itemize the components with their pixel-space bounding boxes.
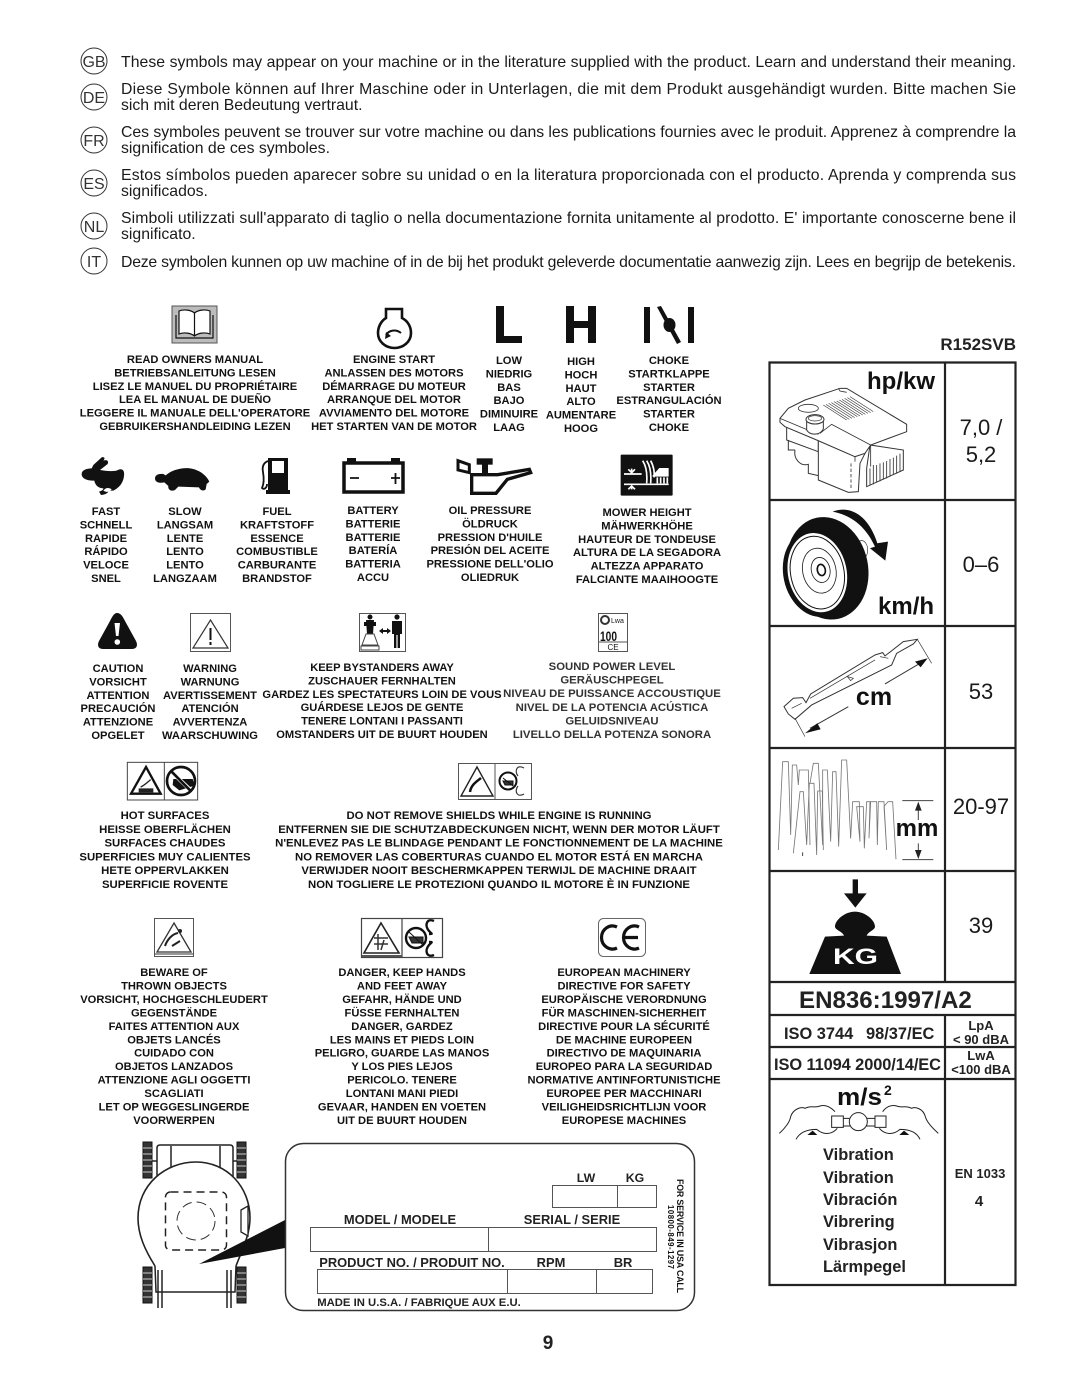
row: vibration: Lärmpegel: [823, 1258, 906, 1276]
label: high: ALTO: [566, 396, 596, 408]
label: mower height: HAUTEUR DE TONDEUSE: [578, 534, 716, 546]
label: slow: LANGSAM: [157, 519, 213, 531]
label: danger keep hands: LES MAINS ET PIEDS LOIN: [330, 1034, 474, 1046]
panel: serial number plate: LW: [577, 1171, 596, 1185]
row: ISO 3744: [784, 1018, 1010, 1047]
label: read owners manual: GEBRUIKERSHANDLEIDING LEZEN: [99, 421, 291, 433]
table grid: [769, 362, 1016, 1285]
panel: serial number plate: MODEL / MODELE: [344, 1212, 457, 1227]
label: engine start: HET STARTEN VAN DE MOTOR: [311, 421, 477, 433]
label: high: HAUT: [566, 383, 597, 395]
label: european machinery: VEILIGHEIDSRICHTLIJN VOOR: [542, 1102, 706, 1114]
NL paragraph: [81, 210, 1016, 243]
row: cutting width: cm: [856, 683, 892, 711]
row: engine power: 5,2: [966, 442, 996, 467]
label: beware of thrown objects: OBJETS LANCÉS: [127, 1033, 221, 1046]
row: ISO 3744: < 90 dBA: [953, 1032, 1010, 1047]
icon: sound power level: Lwa: [611, 618, 624, 625]
icon: letter H: [566, 306, 596, 343]
icon: grass blades: [778, 760, 896, 859]
label: beware of thrown objects: CUIDADO CON: [134, 1048, 214, 1060]
page number: 9: [543, 1333, 553, 1354]
row: vibration: EN 1033: [955, 1166, 1005, 1181]
label: oil pressure: PRESSIONE DELL'OLIO: [426, 559, 554, 571]
label: fast: RÁPIDO: [84, 545, 128, 558]
row: vibration: Vibración: [823, 1191, 897, 1209]
label: beware of thrown objects: BEWARE OF: [140, 967, 208, 979]
icon: keep shields on: [458, 763, 532, 800]
label: danger keep hands: DANGER, KEEP HANDS: [338, 967, 466, 979]
label: keep bystanders away: ZUSCHAUER FERNHALTEN: [308, 675, 456, 687]
label: sound power level: GELUIDSNIVEAU: [565, 715, 659, 727]
label: engine start: DÉMARRAGE DU MOTEUR: [322, 380, 466, 393]
label: oil pressure: PRESIÓN DEL ACEITE: [431, 544, 549, 557]
model name: R152SVB: [940, 335, 1016, 354]
row: ISO 3744: 98/37/EC: [866, 1025, 935, 1043]
icon: sound power level: CE: [607, 643, 619, 652]
label: slow: LENTE: [167, 533, 203, 545]
label: european machinery: EUROPÄISCHE VERORDNUNG: [541, 993, 707, 1006]
row: weight: 39: [969, 913, 993, 938]
label: beware of thrown objects: SCAGLIATI: [144, 1088, 204, 1100]
row: ISO 11094: LwA: [967, 1048, 995, 1063]
icon: CE mark: [598, 918, 646, 956]
label: caution: ATTENZIONE: [83, 717, 153, 729]
label: danger keep hands: AND FEET AWAY: [357, 980, 448, 992]
panel: specification table: [769, 362, 1016, 1285]
label: high: HIGH: [567, 356, 595, 368]
label: keep bystanders away: KEEP BYSTANDERS AWAY: [310, 662, 454, 674]
label: read owners manual: BETRIEBSANLEITUNG LESEN: [114, 367, 276, 379]
label: oil pressure: OIL PRESSURE: [449, 505, 531, 517]
label: fuel: COMBUSTIBLE: [236, 546, 318, 558]
label: danger keep hands: PELIGRO, GUARDE LAS MANOS: [315, 1048, 489, 1060]
label: fast: SNEL: [91, 573, 121, 585]
icon: hands on handle: [779, 1105, 938, 1139]
label: low: LOW: [496, 355, 522, 367]
label: european machinery: NORMATIVE ANTINFORTUNISTICHE: [527, 1075, 721, 1087]
panel: serial number plate: KG: [626, 1171, 644, 1185]
label: fuel: ESSENCE: [250, 533, 304, 545]
label: caution: VORSICHT: [89, 676, 147, 688]
label: engine start: AVVIAMENTO DEL MOTORE: [319, 408, 469, 420]
label: beware of thrown objects: ATTENZIONE AGLI OGGETTI: [98, 1075, 250, 1087]
label: do not remove shields: NO REMOVER LAS COBERTURAS CUANDO EL MOTOR ESTÁ EN MARCHA: [295, 850, 703, 863]
label: beware of thrown objects: GEGENSTÄNDE: [131, 1006, 217, 1019]
NL paragraph: Simboli utilizzati sull'apparato di taglio o nella documentazione fornita unitamente al prodotto. E' importante conoscerne bene il: [121, 210, 1016, 227]
IT paragraph: Deze symbolen kunnen op uw machine of in de bij het produkt geleverde documentatie aanwezig zijn. Lees en begrijp de betekenis.: [121, 254, 1016, 271]
intro text: multilingual explanation: [81, 48, 1016, 274]
label: warning: AVERTISSEMENT: [163, 690, 257, 702]
label: do not remove shields: ENTFERNEN SIE DIE SCHUTZABDECKUNGEN NICHT, WENN DER MOTOR LÄUFT: [278, 823, 720, 836]
label: european machinery: DIRECTIVO DE MAQUINARIA: [547, 1048, 701, 1060]
label: low: DIMINUIRE: [480, 409, 538, 421]
DE paragraph: [81, 81, 1016, 114]
row: cutting height: [778, 760, 1009, 860]
label: european machinery: FÜR MASCHINEN-SICHERHEIT: [542, 1006, 707, 1019]
row: ISO 3744: LpA: [968, 1018, 994, 1033]
label: battery: ACCU: [357, 572, 389, 584]
DE paragraph: Diese Symbole können auf Ihrer Maschine oder in Unterlagen, die mit dem Produkt ausgehändigt wurden. Bitte machen Sie: [121, 81, 1016, 98]
label: choke: STARTER: [643, 382, 695, 394]
label: fuel: FUEL: [262, 506, 292, 518]
row: ISO 3744: ISO 3744: [784, 1025, 854, 1043]
label: european machinery: DIRECTIVE POUR LA SÉCURITÉ: [538, 1020, 710, 1033]
icon: rabbit: [82, 457, 124, 495]
panel: serial number plate: MADE IN U.S.A. / FABRIQUE AUX E.U.: [317, 1297, 521, 1309]
row: weight: [809, 879, 993, 974]
label: slow: LANGZAAM: [153, 573, 217, 585]
label: keep bystanders away: GUÁRDESE LEJOS DE GENTE: [301, 701, 463, 714]
row: ISO 11094: [774, 1048, 1011, 1077]
label: beware of thrown objects: LET OP WEGGESLINGERDE: [99, 1102, 249, 1114]
label: hot surfaces: HOT SURFACES: [121, 810, 210, 822]
DE paragraph: DE: [83, 90, 105, 107]
label: caution: CAUTION: [93, 663, 143, 675]
icon: danger keep hands away: [362, 918, 442, 958]
IT paragraph: [81, 248, 1016, 274]
panel: serial number plate: [286, 1144, 694, 1310]
label: sound power level: NIVEL DE LA POTENCIA ACÚSTICA: [516, 701, 708, 714]
row: cutting height: mm: [896, 815, 938, 842]
label: hot surfaces: SUPERFICIE ROVENTE: [102, 879, 228, 891]
label: low: BAS: [497, 382, 521, 394]
row: vibration: 4: [975, 1193, 984, 1210]
panel: serial number plate: FOR SERVICE IN USA CALL: [675, 1179, 685, 1294]
label: european machinery: EUROPESE MACHINES: [562, 1115, 686, 1127]
panel: serial number plate: RPM: [537, 1255, 565, 1270]
label: beware of thrown objects: OBJETOS LANZADOS: [115, 1061, 233, 1073]
panel: serial number plate: 10800-849-1297: [666, 1205, 675, 1269]
panel: serial number plate: BR: [614, 1255, 633, 1270]
label: fuel: BRANDSTOF: [242, 573, 312, 585]
panel: serial number plate: PRODUCT NO. / PRODUIT NO.: [319, 1255, 505, 1270]
row: vibration: Vibration: [823, 1146, 894, 1164]
icon: engine drawing: [780, 388, 907, 492]
label: mower height: MÄHWERKHÖHE: [601, 519, 693, 532]
ES paragraph: significados.: [121, 183, 208, 200]
GB paragraph: GB: [82, 54, 106, 71]
NL paragraph: significato.: [121, 226, 196, 243]
icon: mower height: [621, 455, 673, 496]
label: engine start: ANLASSEN DES MOTORS: [324, 367, 464, 379]
ES paragraph: ES: [83, 176, 105, 193]
row: engine power: [780, 368, 1003, 492]
row: speed: km/h: [878, 593, 934, 620]
label: warning: AVVERTENZA: [173, 717, 247, 729]
icon: choke: [644, 306, 694, 344]
row: ISO 11094: <100 dBA: [951, 1062, 1011, 1077]
NL paragraph: NL: [84, 219, 104, 236]
label: low: BAJO: [494, 395, 525, 407]
icon: hot surfaces: [127, 762, 198, 800]
label: sound power level: GERÄUSCHPEGEL: [560, 674, 664, 687]
label: keep bystanders away: GARDEZ LES SPECTATEURS LOIN DE VOUS: [262, 689, 502, 701]
icon: weight: [809, 879, 901, 974]
FR paragraph: Ces symboles peuvent se trouver sur votre machine ou dans les publications fournies avec le produit. Apprenez à comprendre la: [121, 124, 1016, 141]
label: danger keep hands: FÜSSE FERNHALTEN: [345, 1006, 459, 1019]
row: vibration: Vibrering: [823, 1213, 895, 1231]
icon: turtle: [155, 468, 209, 491]
icon: mower blade: [784, 639, 932, 737]
label: european machinery: EUROPEO PARA LA SEGURIDAD: [536, 1061, 712, 1073]
row: speed: 0–6: [963, 552, 999, 577]
label: beware of thrown objects: THROWN OBJECTS: [121, 980, 227, 992]
label: warning: WARNUNG: [181, 676, 239, 688]
icon: fuel pump: [262, 458, 290, 494]
row: weight: KG: [833, 944, 878, 969]
row: cutting width: [784, 639, 993, 737]
icon: warning triangle: [190, 614, 230, 652]
row: speed: [775, 509, 999, 627]
label: warning: WARNING: [183, 663, 237, 675]
label: choke: STARTKLAPPE: [628, 368, 710, 380]
label: oil pressure: PRESSION D'HUILE: [438, 532, 542, 544]
label: mower height: ALTEZZA APPARATO: [591, 561, 704, 573]
icon: wheel: [775, 509, 888, 627]
label: battery: BATTERIE: [346, 532, 400, 544]
label: engine start: ENGINE START: [353, 354, 435, 366]
label: fast: SCHNELL: [80, 519, 132, 531]
row: vibration: Vibrasjon: [823, 1236, 897, 1254]
label: caution: ATTENTION: [87, 690, 149, 702]
label: warning: ATENCIÓN: [181, 702, 239, 715]
label: read owners manual: LEA EL MANUAL DE DUEÑO: [119, 393, 271, 406]
label: mower height: ALTURA DE LA SEGADORA: [573, 547, 721, 559]
row: engine power: 7,0 /: [960, 415, 1003, 440]
label: choke: ESTRANGULACIÓN: [616, 394, 722, 407]
label: fuel: CARBURANTE: [238, 560, 316, 572]
label: low: NIEDRIG: [486, 368, 532, 380]
row: cutting height: 20-97: [953, 794, 1009, 819]
label: read owners manual: LEGGERE IL MANUALE DELL'OPERATORE: [80, 408, 310, 420]
label: do not remove shields: N'ENLEVEZ PAS LE BLINDAGE PENDANT LE FONCTIONNEMENT DE LA MACHINE: [275, 838, 723, 850]
label: beware of thrown objects: VOORWERPEN: [133, 1115, 215, 1127]
ES paragraph: Estos símbolos pueden aparecer sobre su unidad o en la literatura proporcionada con el producto. Aprenda y comprenda sus: [121, 167, 1016, 184]
icon: thrown objects: [154, 918, 194, 956]
row: vibration: m/s: [837, 1084, 882, 1111]
label: danger keep hands: DANGER, GARDEZ: [351, 1021, 453, 1033]
label: danger keep hands: GEFAHR, HÄNDE UND: [342, 993, 462, 1006]
label: choke: CHOKE: [649, 355, 689, 367]
label: battery: BATTERY: [347, 505, 399, 517]
label: danger keep hands: PERICOLO. TENERE: [347, 1075, 457, 1087]
label: european machinery: DIRECTIVE FOR SAFETY: [557, 980, 691, 992]
label: danger keep hands: GEVAAR, HANDEN EN VOETEN: [318, 1102, 486, 1114]
label: keep bystanders away: TENERE LONTANI I PASSANTI: [301, 716, 463, 728]
row: ISO 11094: ISO 11094 2000/14/EC: [774, 1056, 941, 1074]
DE paragraph: sich mit deren Bedeutung vertraut.: [121, 97, 362, 114]
label: beware of thrown objects: FAITES ATTENTION AUX: [109, 1021, 240, 1033]
label: mower height: MOWER HEIGHT: [602, 507, 692, 519]
label: choke: CHOKE: [649, 422, 689, 434]
icon: keep bystanders away: [360, 614, 406, 652]
icon: letter L: [496, 306, 522, 343]
heading: EN standard: EN836:1997/A2: [799, 987, 972, 1014]
label: slow: LENTO: [166, 560, 204, 572]
label: european machinery: EUROPEAN MACHINERY: [557, 967, 691, 979]
label: mower height: FALCIANTE MAAIHOOGTE: [576, 574, 718, 586]
illustration: mower top view: [138, 1142, 250, 1308]
label: oil pressure: OLIEDRUK: [461, 572, 519, 584]
label: read owners manual: LISEZ LE MANUEL DU PROPRIÉTAIRE: [93, 380, 297, 393]
label: do not remove shields: NON TOGLIERE LE PROTEZIONI QUANDO IL MOTORE È IN FUNZIONE: [308, 878, 690, 891]
FR paragraph: [81, 124, 1016, 157]
label: fuel: KRAFTSTOFF: [240, 519, 314, 531]
icon: sound power level: [598, 614, 628, 652]
label: high: AUMENTARE: [546, 410, 616, 422]
label: fast: RAPIDE: [85, 533, 127, 545]
FR paragraph: signification de ces symboles.: [121, 140, 330, 157]
label: caution: OPGELET: [91, 730, 145, 742]
row: engine power: hp/kw: [867, 368, 935, 395]
label: oil pressure: ÖLDRUCK: [462, 517, 518, 530]
label: do not remove shields: DO NOT REMOVE SHIELDS WHILE ENGINE IS RUNNING: [346, 810, 652, 822]
label: fast: FAST: [92, 506, 120, 518]
label: european machinery: DE MACHINE EUROPEEN: [556, 1034, 692, 1046]
label: warning: WAARSCHUWING: [162, 730, 258, 742]
GB paragraph: [81, 48, 1016, 74]
label: battery: BATTERIE: [346, 518, 400, 530]
row: cutting width: 53: [969, 679, 993, 704]
label: sound power level: NIVEAU DE PUISSANCE ACCOUSTIQUE: [503, 688, 721, 700]
label: sound power level: LIVELLO DELLA POTENZA SONORA: [513, 729, 711, 741]
row: vibration: Vibration: [823, 1169, 894, 1187]
label: battery: BATTERIA: [345, 559, 401, 571]
label: battery: BATERÍA: [349, 544, 397, 557]
label: engine start: ARRANQUE DEL MOTOR: [327, 394, 461, 406]
label: sound power level: SOUND POWER LEVEL: [549, 661, 675, 673]
label: hot surfaces: SURFACES CHAUDES: [104, 838, 226, 850]
row: vibration: 2: [884, 1082, 892, 1098]
GB paragraph: These symbols may appear on your machine or in the literature supplied with the product. Learn and understand their meaning.: [121, 54, 1016, 71]
label: keep bystanders away: OMSTANDERS UIT DE BUURT HOUDEN: [276, 729, 488, 741]
icon: battery: [344, 458, 403, 492]
ES paragraph: [81, 167, 1016, 200]
label: beware of thrown objects: VORSICHT, HOCHGESCHLEUDERT: [80, 994, 268, 1006]
label: slow: SLOW: [168, 506, 202, 518]
icon: oil can: [458, 458, 531, 493]
label: danger keep hands: Y LOS PIES LEJOS: [351, 1061, 453, 1073]
label: do not remove shields: VERWIJDER NOOIT BESCHERMKAPPEN TERWIJL DE MACHINE DRAAIT: [301, 865, 697, 877]
label: read owners manual: READ OWNERS MANUAL: [127, 354, 263, 366]
FR paragraph: FR: [83, 133, 105, 150]
label: danger keep hands: LONTANI MANI PIEDI: [346, 1088, 458, 1100]
mm dimension: [902, 801, 933, 860]
label: european machinery: EUROPEE PER MACCHINARI: [546, 1088, 702, 1100]
icon: caution triangle: [98, 613, 137, 649]
icon: engine start: [378, 309, 411, 348]
callout: pointer from mower to label: [199, 1220, 285, 1264]
label: caution: PRECAUCIÓN: [81, 702, 155, 715]
icon: sound power level: 100: [600, 628, 617, 644]
row: vibration: [779, 1082, 1005, 1276]
label: danger keep hands: UIT DE BUURT HOUDEN: [337, 1115, 467, 1127]
panel: serial number plate: SERIAL / SERIE: [524, 1212, 621, 1227]
label: slow: LENTO: [166, 546, 204, 558]
label: hot surfaces: SUPERFICIES MUY CALIENTES: [79, 851, 251, 863]
label: high: HOCH: [565, 369, 597, 381]
icon: read manual book: [172, 306, 217, 343]
label: hot surfaces: HETE OPPERVLAKKEN: [101, 865, 229, 877]
label: high: HOOG: [564, 423, 598, 435]
label: hot surfaces: HEISSE OBERFLÄCHEN: [99, 823, 231, 836]
label: choke: STARTER: [643, 409, 695, 421]
label: low: LAAG: [493, 422, 525, 434]
IT paragraph: IT: [87, 254, 101, 271]
label: fast: VELOCE: [83, 560, 129, 572]
